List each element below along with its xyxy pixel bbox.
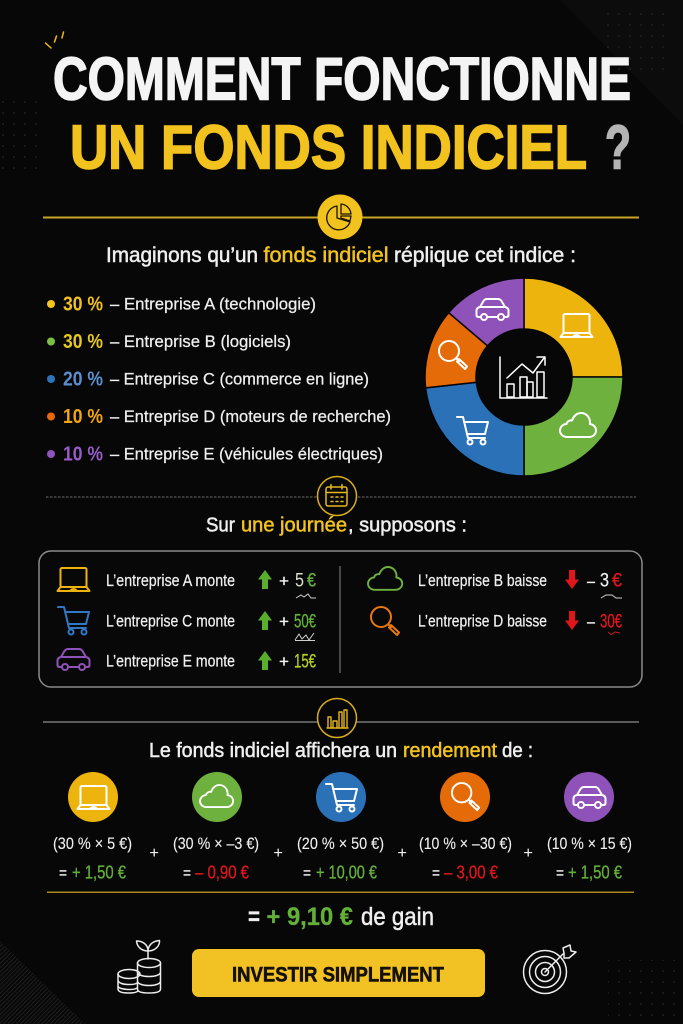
total gain: + 9,10 € (266, 903, 353, 931)
plus: + (274, 845, 283, 862)
column B: – 0,90 € (195, 862, 249, 882)
row D: – (587, 612, 595, 631)
item E: – Entreprise E (véhicules électriques) (110, 444, 383, 464)
heading: return: de : (502, 740, 533, 762)
button: INVESTIR SIMPLEMENT (232, 962, 444, 986)
row D: L’entreprise D baisse (418, 612, 547, 630)
column B: (30 % × –3 €) (173, 835, 259, 853)
row B: € (612, 570, 622, 592)
column C: + 10,00 € (316, 862, 377, 882)
item E: 10 % (63, 444, 103, 466)
row C: 50€ (294, 612, 316, 632)
plus: + (150, 845, 159, 862)
segment B green (524, 377, 623, 476)
column E: + 1,50 € (568, 862, 622, 882)
item C (47, 368, 369, 390)
heading: return: Le fonds indiciel affichera un (149, 740, 397, 762)
column E (547, 772, 632, 882)
donut icons (439, 299, 596, 444)
total gain: = (248, 903, 260, 931)
title: UN FONDS INDICIEL (70, 114, 587, 182)
donut chart (425, 278, 623, 476)
row D (371, 607, 622, 635)
total gain (248, 903, 434, 931)
composition list (47, 294, 391, 466)
column B: = (183, 865, 191, 882)
column A: = (59, 865, 67, 882)
item A: 30 % (63, 294, 103, 316)
heading: index (106, 244, 576, 267)
row A: € (307, 570, 316, 592)
item D: – Entreprise D (moteurs de recherche) (110, 407, 391, 426)
centre chart icon (500, 357, 547, 398)
heading: index: Imaginons qu’un (106, 244, 258, 267)
heading: one day: Sur (206, 514, 235, 536)
item B: 30 % (63, 331, 103, 353)
plus: + (524, 845, 533, 862)
segment D orange (425, 313, 488, 388)
row A (58, 568, 316, 598)
button (192, 949, 485, 997)
heading: index: réplique cet indice : (394, 244, 576, 267)
row E: 15€ (294, 652, 316, 672)
total rule (47, 892, 634, 893)
section divider with bars icon (43, 698, 639, 738)
calculation columns (53, 772, 632, 882)
row B: L’entreprise B baisse (418, 572, 547, 590)
title (53, 46, 631, 182)
row B: 3 (600, 570, 609, 592)
column C (297, 772, 384, 882)
row A: + (279, 572, 289, 590)
icon: coins with sprout (118, 940, 160, 993)
heading: one day (206, 514, 467, 536)
column D: (10 % × –30 €) (419, 835, 512, 853)
item B: – Entreprise B (logiciels) (110, 332, 291, 351)
row C (58, 607, 316, 640)
column E: = (556, 865, 564, 882)
item B (47, 331, 291, 353)
panel: daily moves (39, 551, 642, 687)
column B (173, 772, 259, 882)
item C: – Entreprise C (commerce en ligne) (110, 370, 369, 388)
row C: + (279, 612, 289, 631)
row E: + (279, 652, 289, 671)
heading: return (149, 740, 533, 762)
heading: index: fonds indiciel (264, 244, 388, 267)
segment E purple (449, 278, 524, 346)
segment C blue (426, 382, 524, 476)
column D: – 3,00 € (444, 862, 498, 882)
item E (47, 444, 383, 466)
row B: – (587, 572, 595, 590)
row D: 30€ (600, 612, 622, 632)
section divider with pie icon (43, 194, 639, 240)
column C: = (303, 865, 311, 882)
heading: one day: , supposons : (348, 514, 467, 536)
column E: (10 % × 15 €) (547, 835, 632, 853)
item D: 10 % (63, 406, 103, 428)
segment A yellow (524, 278, 623, 377)
heading: return: rendement (403, 740, 497, 762)
row A: L’entreprise A monte (106, 572, 235, 590)
title: ? (605, 114, 631, 182)
item A (47, 294, 316, 316)
icon: target with arrow (524, 945, 576, 994)
section divider with calendar icon (46, 476, 636, 516)
item A: – Entreprise A (technologie) (110, 294, 316, 314)
heading: one day: une journée (241, 514, 347, 536)
column D (419, 772, 512, 882)
total gain: de gain (361, 903, 434, 931)
column A: + 1,50 € (72, 862, 126, 882)
row B (368, 567, 622, 598)
row A: 5 (295, 570, 304, 592)
row E: L’entreprise E monte (106, 652, 235, 670)
column A (53, 772, 132, 882)
row C: L’entreprise C monte (106, 612, 235, 630)
column C: (20 % × 50 €) (297, 835, 384, 853)
column A: (30 % × 5 €) (53, 835, 132, 853)
item D (47, 406, 391, 428)
plus: + (398, 845, 407, 862)
column D: = (432, 865, 440, 882)
item C: 20 % (63, 368, 103, 390)
row E (58, 649, 316, 672)
sparkle accent (46, 32, 64, 48)
